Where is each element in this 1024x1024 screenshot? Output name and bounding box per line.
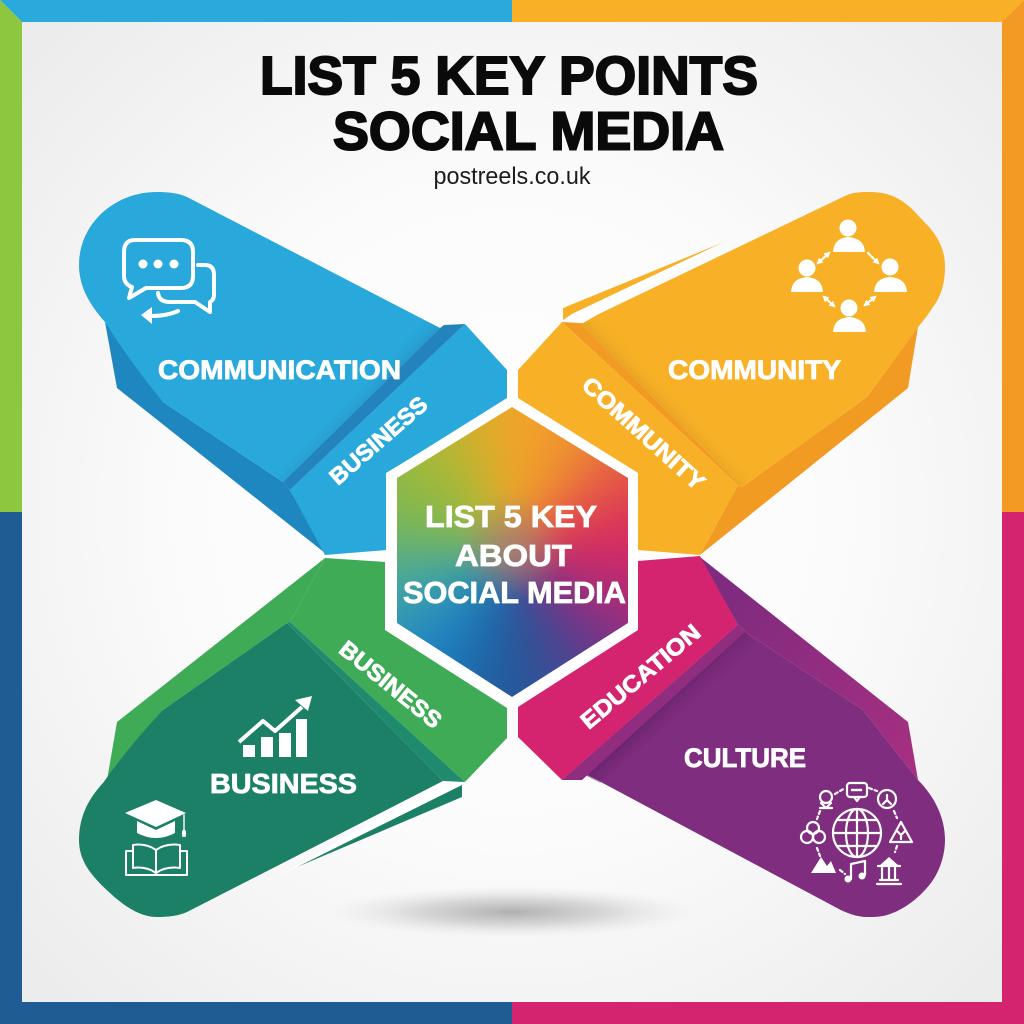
icon: community people	[791, 220, 907, 332]
label: community: COMMUNITY	[668, 355, 841, 385]
panel: business	[79, 558, 507, 917]
title	[260, 46, 758, 162]
website url: postreels.co.uk	[434, 163, 591, 190]
label: business tab: BUSINESS	[334, 635, 447, 734]
floor shadow	[324, 886, 700, 938]
centre hexagon	[386, 397, 638, 707]
label: culture: CULTURE	[684, 743, 806, 773]
icon: chat bubbles	[124, 240, 214, 324]
title: LIST 5 KEY POINTS	[260, 46, 758, 106]
hexagon text: ABOUT	[455, 538, 572, 573]
panel: culture	[518, 556, 945, 917]
icon: graduation cap and book	[125, 800, 187, 875]
hexagon text: SOCIAL MEDIA	[403, 575, 626, 610]
panel: communication	[79, 192, 507, 555]
label: education tab: EDUCATION	[575, 619, 705, 734]
title: SOCIAL MEDIA	[333, 102, 724, 162]
icon: culture globe	[801, 783, 912, 884]
icon: growth chart	[239, 696, 312, 757]
label: community tab: COMMUNITY	[577, 372, 710, 495]
label: business tab: BUSINESS	[324, 391, 433, 490]
label: communication: COMMUNICATION	[158, 355, 401, 385]
label: business: BUSINESS	[210, 768, 357, 799]
hexagon text: LIST 5 KEY	[425, 499, 597, 534]
panel: community	[518, 192, 945, 555]
hexagon text	[403, 499, 626, 610]
